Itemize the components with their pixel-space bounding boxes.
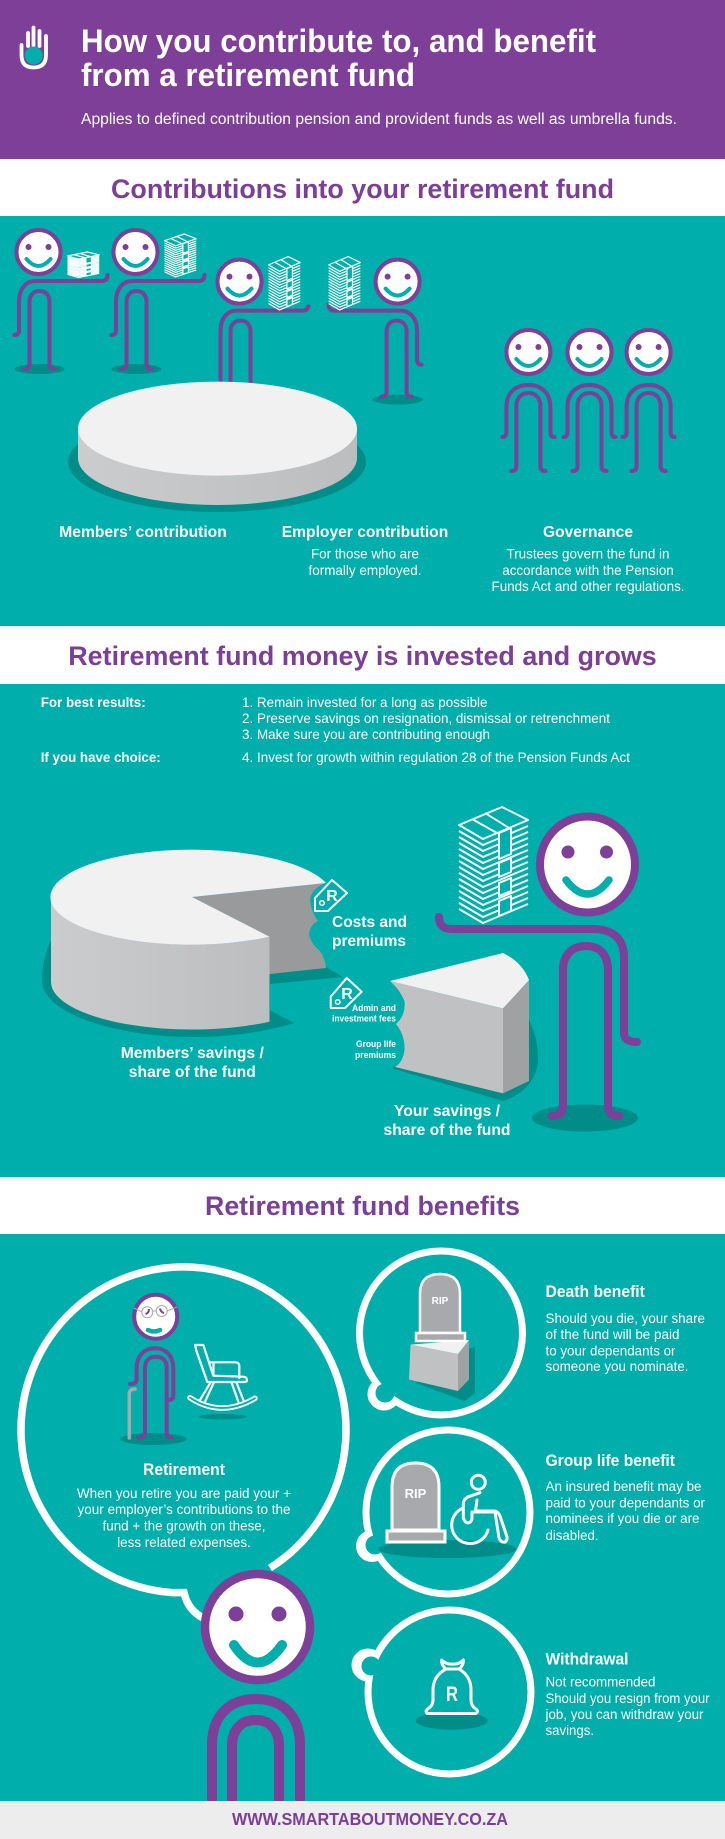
label: fees: Admin and bbox=[352, 1003, 396, 1014]
retirement text: fund + the growth on these, bbox=[102, 1518, 266, 1534]
icon: money bag bbox=[416, 1660, 488, 1730]
icon: fee tag: R bbox=[341, 986, 353, 1003]
heading: invested: Retirement fund money is invested and grows bbox=[68, 641, 657, 671]
withdrawal text: Not recommended bbox=[546, 1674, 656, 1690]
withdrawal text: savings. bbox=[546, 1722, 594, 1738]
death benefit text: Should you die, your share bbox=[546, 1310, 705, 1326]
label: your savings bbox=[384, 1103, 510, 1139]
heading: benefits: Retirement fund benefits bbox=[205, 1191, 520, 1221]
label: your savings: share of the fund bbox=[384, 1122, 510, 1139]
icon: rocking chair bbox=[190, 1345, 255, 1419]
retirement text: Retirement bbox=[143, 1460, 225, 1479]
label: costs and premiums bbox=[332, 914, 407, 950]
death benefit text: Death benefit bbox=[546, 1282, 645, 1301]
shadow under icons bbox=[378, 1540, 516, 1558]
panel: benefits bbox=[0, 1234, 725, 1801]
icon: gravestone: RIP bbox=[405, 1486, 427, 1501]
retirement text: less related expenses. bbox=[117, 1534, 251, 1550]
caption: governance bbox=[492, 524, 684, 594]
header panel bbox=[0, 0, 725, 159]
withdrawal text bbox=[545, 1650, 710, 1738]
caption: governance: Funds Act and other regulations. bbox=[492, 578, 684, 594]
person: large smiling member bbox=[205, 1574, 310, 1801]
caption: governance: Governance bbox=[543, 524, 633, 541]
bubble: withdrawal bbox=[352, 1606, 534, 1778]
heading: contributions: Contributions into your retirement fund bbox=[111, 174, 614, 204]
person: saver with money stack bbox=[439, 807, 638, 1132]
bubble: group life benefit bbox=[356, 1426, 534, 1598]
person: member with small contribution bbox=[14, 230, 108, 374]
group life text: disabled. bbox=[546, 1527, 598, 1543]
best results list: 1. Remain invested for a long as possible bbox=[242, 694, 488, 710]
bubble: death benefit bbox=[356, 1248, 526, 1418]
group life text: paid to your dependants or bbox=[546, 1494, 705, 1510]
caption: members' contribution: Members’ contribution bbox=[59, 524, 227, 541]
label: fees bbox=[332, 1003, 396, 1024]
group life text: An insured benefit may be bbox=[546, 1478, 702, 1494]
label: members' savings bbox=[121, 1045, 264, 1081]
withdrawal text: Should you resign from your bbox=[546, 1690, 710, 1706]
icon: gravestone on slice bbox=[409, 1274, 475, 1401]
title bbox=[81, 23, 596, 93]
chart: whole fund disc bbox=[68, 382, 366, 512]
panel: invested and grows bbox=[0, 684, 725, 1177]
icon: raised hand bbox=[22, 28, 46, 68]
person: member with large contribution bbox=[112, 230, 204, 374]
caption: employer contribution: For those who are bbox=[311, 546, 419, 562]
label: your savings: Your savings / bbox=[394, 1103, 501, 1120]
label: fees: investment fees bbox=[332, 1014, 396, 1024]
retired person bbox=[120, 1295, 186, 1445]
icon: gravestone on slice: RIP bbox=[432, 1296, 449, 1307]
title: How you contribute to, and benefit bbox=[81, 23, 596, 59]
best results list: For best results: bbox=[41, 694, 146, 710]
icon: gravestone bbox=[387, 1463, 445, 1542]
withdrawal text: job, you can withdraw your bbox=[545, 1706, 704, 1722]
person: employer giving contribution bbox=[218, 257, 308, 392]
best results list: 4. Invest for growth within regulation 28 of the Pension Funds Act bbox=[242, 749, 630, 765]
label: members' savings: share of the fund bbox=[129, 1064, 256, 1081]
caption: employer contribution: Employer contribution bbox=[282, 524, 448, 541]
best results list: 3. Make sure you are contributing enough bbox=[242, 726, 490, 742]
icon: money bag: R bbox=[446, 1683, 458, 1706]
best results list bbox=[41, 694, 630, 765]
label: costs and premiums: premiums bbox=[332, 933, 406, 950]
caption: employer contribution bbox=[282, 524, 448, 578]
retirement text: your employer’s contributions to the bbox=[78, 1501, 291, 1517]
panel: contributions bbox=[0, 216, 725, 626]
death benefit text bbox=[546, 1282, 705, 1374]
best results list: If you have choice: bbox=[41, 749, 161, 765]
icon: cost tag: R bbox=[326, 888, 338, 905]
icon: fee tag bbox=[331, 978, 362, 1008]
label: group life premiums: Group life bbox=[356, 1039, 396, 1050]
retirement text: When you retire you are paid your + bbox=[77, 1485, 291, 1501]
retirement text bbox=[77, 1460, 291, 1550]
death benefit text: of the fund will be paid bbox=[546, 1326, 680, 1342]
icon: wheelchair bbox=[452, 1475, 507, 1544]
withdrawal text: Withdrawal bbox=[546, 1650, 628, 1668]
group life text: Group life benefit bbox=[546, 1451, 675, 1470]
best results list: 2. Preserve savings on resignation, dismissal or retrenchment bbox=[242, 710, 610, 726]
caption: employer contribution: formally employed. bbox=[308, 562, 422, 578]
death benefit text: to your dependants or bbox=[546, 1342, 676, 1358]
label: members' savings: Members’ savings / bbox=[121, 1045, 264, 1062]
chart: fund with slice removed bbox=[42, 850, 343, 1037]
chart: your slice of the fund bbox=[390, 953, 538, 1101]
person: employer facing left bbox=[329, 257, 423, 405]
icon: cost tag bbox=[315, 880, 347, 911]
label: group life premiums bbox=[355, 1039, 396, 1061]
group life text: nominees if you die or are bbox=[546, 1510, 700, 1526]
speech bubble: retirement bbox=[21, 1267, 346, 1619]
death benefit text: someone you nominate. bbox=[546, 1358, 688, 1374]
caption: governance: Trustees govern the fund in bbox=[506, 546, 670, 562]
footer bbox=[0, 1801, 725, 1839]
caption: governance: accordance with the Pension bbox=[502, 562, 674, 578]
label: costs and premiums: Costs and bbox=[332, 914, 407, 931]
label: group life premiums: premiums bbox=[355, 1050, 396, 1061]
group life text bbox=[546, 1451, 705, 1543]
footer url: WWW.SMARTABOUTMONEY.CO.ZA bbox=[232, 1809, 508, 1829]
title: from a retirement fund bbox=[81, 57, 415, 93]
subtitle: Applies to defined contribution pension and provident funds as well as umbrella funds. bbox=[81, 111, 677, 128]
governance trustees bbox=[502, 330, 675, 471]
